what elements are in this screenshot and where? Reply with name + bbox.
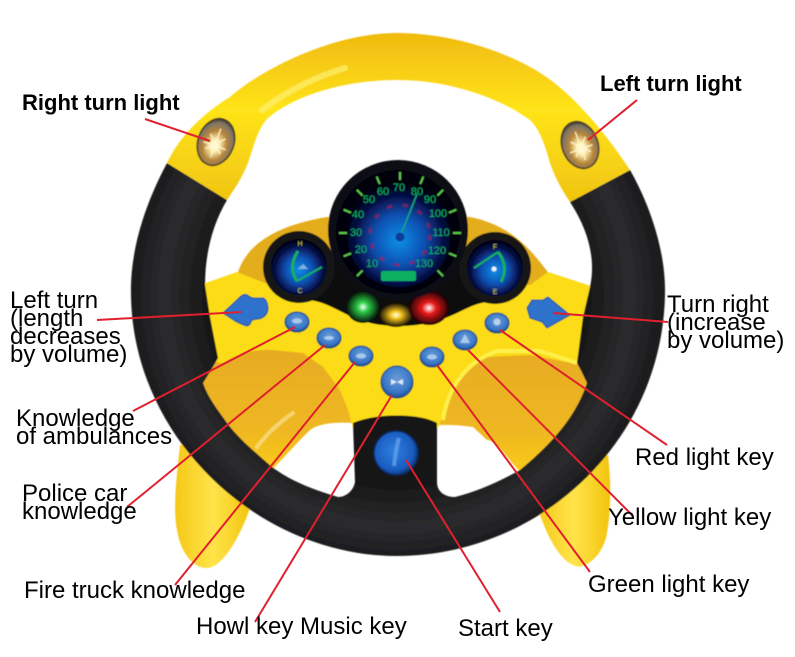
label: left turn: Left turn [10, 287, 98, 314]
speed numbers: 40 [352, 209, 364, 221]
label: left turn light: Left turn light [600, 71, 742, 96]
speed numbers: 120 [428, 245, 446, 257]
yellow hub and spokes [200, 272, 594, 428]
label: knowledge of ambulances: Knowledge [16, 405, 135, 432]
indicator light band [305, 255, 490, 326]
label: red light key: Red light key [635, 444, 774, 471]
green indicator light [346, 291, 380, 323]
right turn light lamp [191, 113, 241, 171]
howl music button [381, 366, 413, 398]
right gauge [459, 232, 531, 304]
arc highlight [262, 68, 345, 110]
red light button [485, 313, 509, 333]
label: green light key: Green light key [588, 571, 749, 598]
major ticks [339, 172, 461, 276]
left arrow key [223, 294, 268, 326]
left gauge: H [297, 241, 303, 248]
left bowl highlight [257, 413, 293, 447]
speed numbers: 80 [411, 186, 423, 198]
label: police car knowledge: Police car [22, 480, 127, 507]
yellow top arc [167, 33, 630, 202]
right support leg [537, 440, 610, 566]
label: yellow light key: Yellow light key [608, 504, 771, 531]
speedometer [328, 160, 468, 300]
speed numbers [350, 182, 450, 270]
label: police car knowledge: knowledge [22, 498, 137, 525]
label: left turn: (length [10, 305, 83, 332]
ambulance button [285, 312, 309, 332]
right lower bowl [437, 345, 600, 472]
speed numbers: 110 [432, 227, 450, 239]
yellow indicator light [379, 303, 413, 327]
label: knowledge of ambulances: of ambulances [16, 423, 172, 450]
needle hub [396, 232, 404, 242]
speed numbers: 20 [355, 244, 367, 256]
left lower bowl [195, 345, 355, 470]
steering wheel [131, 33, 665, 568]
needle [400, 194, 417, 237]
label: turn right: Turn right [667, 291, 769, 318]
speed numbers: 30 [350, 227, 362, 239]
label: turn right: (increase [667, 309, 766, 336]
speed numbers: 70 [393, 182, 405, 194]
start knob [374, 431, 418, 475]
red inner dashes [370, 205, 430, 265]
speed numbers: 100 [429, 208, 447, 220]
label: turn right: by volume) [667, 327, 784, 354]
right arrow key [527, 297, 570, 328]
speed numbers: 10 [366, 258, 378, 270]
label: howl key music key: Howl key Music key [196, 613, 407, 640]
black wheel rim [131, 163, 665, 556]
speed numbers: 60 [377, 186, 389, 198]
right gauge: E [493, 289, 498, 296]
red leader lines [97, 100, 668, 622]
label: start key: Start key [458, 615, 553, 642]
label: fire truck knowledge: Fire truck knowledge [24, 577, 245, 604]
speed numbers: 50 [363, 194, 375, 206]
hub arch [237, 217, 550, 300]
right gauge: F [493, 244, 497, 251]
label: left turn: decreases [10, 323, 121, 350]
odometer [381, 271, 416, 281]
police car button [317, 328, 341, 348]
left turn light lamp [555, 116, 605, 174]
speed numbers: 90 [424, 194, 436, 206]
yellow light button [453, 330, 477, 350]
fire truck button [349, 346, 373, 366]
green light button [420, 347, 444, 367]
red indicator light [409, 291, 449, 325]
right bowl ridge [443, 351, 577, 420]
left gauge [263, 231, 335, 303]
label: left turn: by volume) [10, 341, 127, 368]
left support leg [175, 440, 251, 568]
label: right turn light: Right turn light [22, 90, 180, 115]
speed numbers: 130 [415, 258, 433, 270]
left gauge: C [297, 288, 303, 295]
